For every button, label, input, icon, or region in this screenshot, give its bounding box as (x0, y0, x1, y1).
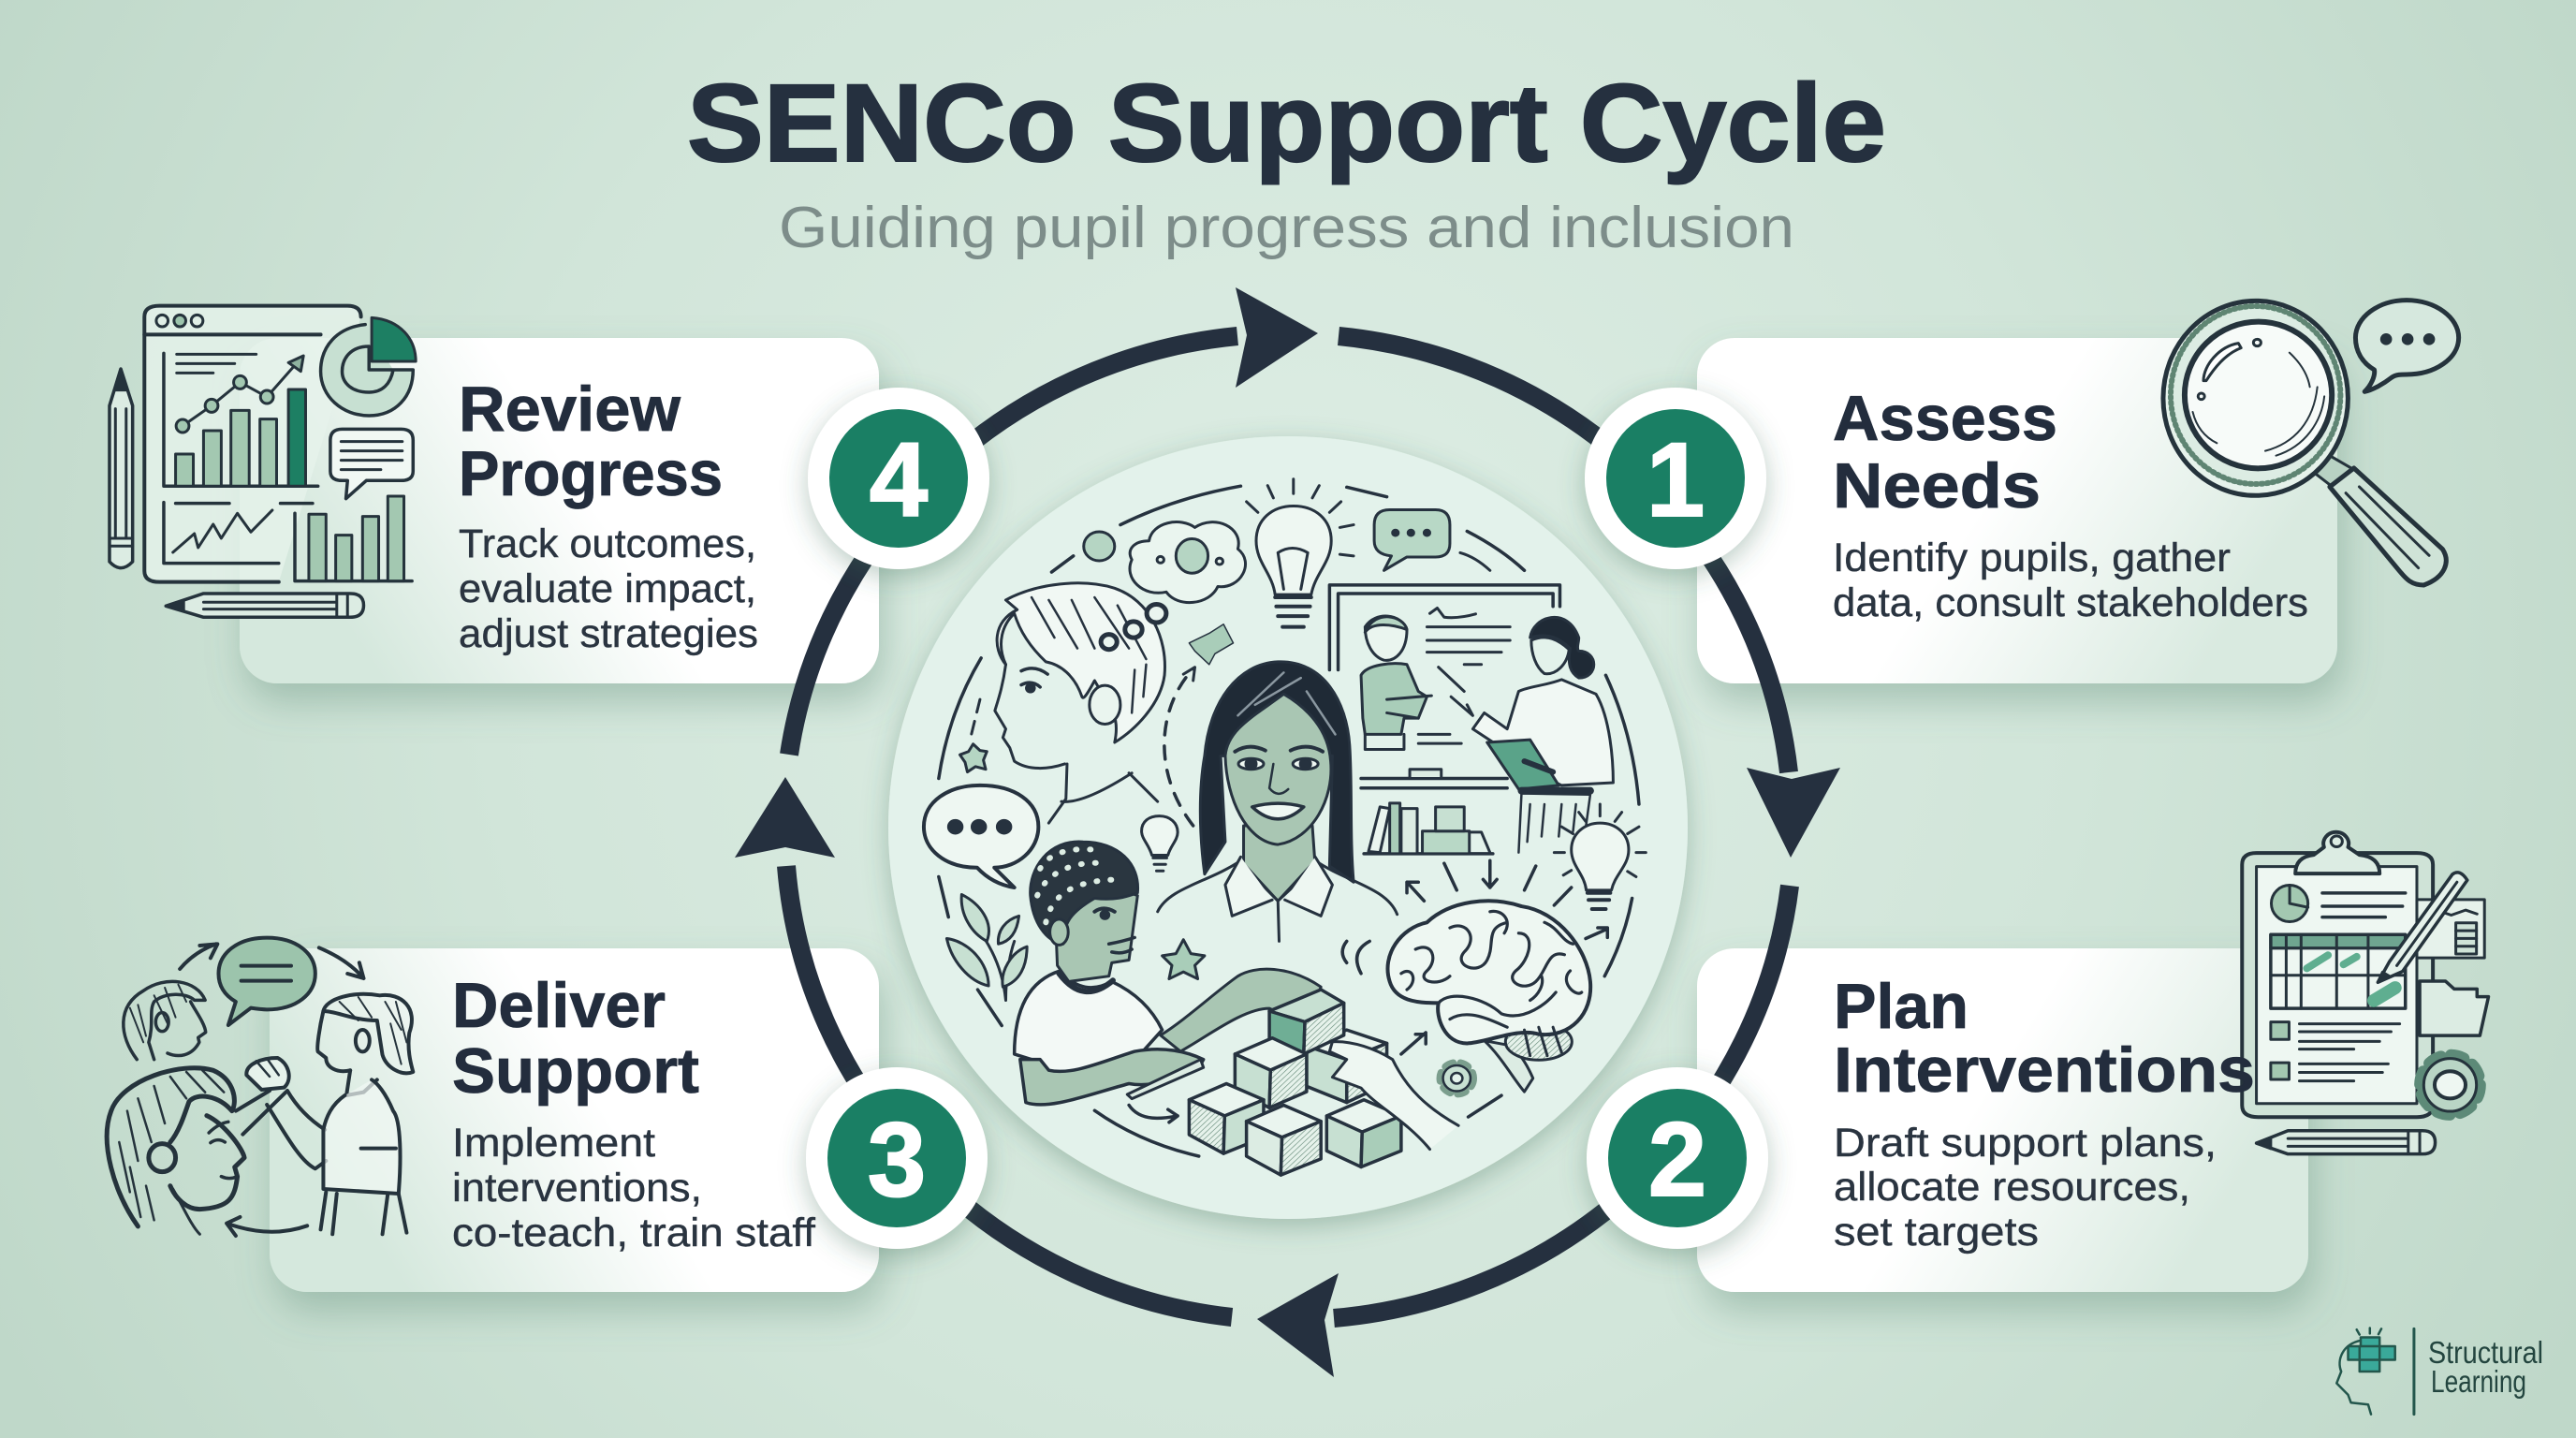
badge 4 (808, 388, 989, 569)
logo mark (2336, 1328, 2414, 1415)
icon: star (1163, 940, 1205, 979)
description: Implement (452, 1121, 655, 1166)
icon: green blob (1189, 624, 1234, 665)
heading line two: Interventions (1834, 1034, 2255, 1106)
block behind (1307, 1030, 1387, 1103)
block middle (1235, 1038, 1307, 1108)
block bottom left (1189, 1084, 1264, 1153)
icon: peer support pupils (107, 938, 413, 1236)
step badges (806, 388, 1768, 1249)
description line two: allocate resources, (1834, 1165, 2190, 1210)
curved arrows (180, 944, 363, 1236)
block top (1269, 990, 1344, 1054)
speech bubble (219, 938, 315, 1025)
icon: thought cloud (1130, 522, 1246, 603)
description line three: co-teach, train staff (452, 1211, 816, 1255)
heading line two: Support (452, 1035, 699, 1107)
description: Identify pupils, gather (1833, 536, 2231, 580)
badge 1 (1585, 388, 1766, 569)
central illustration (924, 479, 1646, 1175)
stack of blocks (1189, 990, 1401, 1175)
description line two: evaluate impact, (459, 566, 756, 611)
horizontal pencil (2257, 1131, 2436, 1154)
document (2417, 900, 2484, 958)
clipboard clip (2295, 832, 2379, 873)
heading: Deliver (452, 970, 666, 1041)
card 4 background (240, 338, 879, 683)
text: step 3 deliver support (452, 970, 816, 1255)
arrows around brain (1342, 860, 1607, 1054)
description line two: interventions, (452, 1166, 702, 1211)
description: Track outcomes, (459, 521, 756, 566)
child building blocks (1015, 842, 1321, 1123)
badge 2 (1587, 1067, 1768, 1249)
icon: review dashboard (110, 306, 416, 617)
clasped hands (236, 1058, 326, 1168)
folder (2420, 981, 2489, 1035)
logo: Structural Learning (2336, 1328, 2543, 1415)
heading line two: Needs (1833, 450, 2041, 521)
donut chart (321, 317, 416, 416)
heading line two: Progress (459, 438, 723, 509)
panel: card backgrounds (240, 338, 2337, 1292)
cycle arrows (735, 287, 1840, 1377)
arrow: review to assess (789, 287, 1318, 755)
description line three: set targets (1834, 1210, 2039, 1255)
arrow: plan to deliver (1257, 886, 1790, 1377)
dashed growth arrow (972, 668, 1195, 826)
heading: Review (459, 374, 681, 445)
text: step 2 plan interventions (1834, 971, 2255, 1255)
title: SENCo Support Cycle (687, 62, 1886, 185)
icon: gear (1441, 1063, 1473, 1093)
girl with ponytail (317, 994, 413, 1234)
block bottom right (1326, 1100, 1401, 1167)
icon: magnifying glass and speech bubble (2163, 301, 2459, 585)
block bottom middle (1247, 1105, 1321, 1175)
vertical pencil (110, 369, 133, 568)
card 1 background (1697, 338, 2337, 683)
logo word two: Learning (2431, 1364, 2526, 1399)
lower bar chart (295, 496, 412, 581)
text: step 4 review progress (459, 374, 758, 656)
description line three: adjust strategies (459, 611, 758, 656)
text: step 1 assess needs (1833, 383, 2308, 625)
subtitle: Guiding pupil progress and inclusion (779, 196, 1794, 260)
badge 1: 1 (1647, 421, 1705, 538)
icon: plant leaves (946, 894, 1027, 1001)
helper hand (1329, 1042, 1458, 1150)
schedule table (2271, 934, 2406, 1008)
badge 3 (806, 1067, 988, 1249)
arrow: assess to plan (1339, 336, 1840, 858)
logo word one: Structural (2428, 1335, 2543, 1370)
card 2 background (1697, 948, 2308, 1292)
teacher and pupil at the board (1329, 585, 1613, 853)
icon: green speech bubble (1374, 509, 1490, 570)
description line two: data, consult stakeholders (1833, 580, 2308, 625)
card 3 background (270, 948, 879, 1292)
books on shelf (1364, 803, 1493, 854)
line chart (164, 503, 313, 564)
dashboard window (144, 306, 361, 582)
diagonal pencil (2378, 873, 2467, 982)
large boy head (107, 1068, 244, 1234)
magnifying glass (2163, 301, 2446, 585)
central disc (888, 436, 1688, 1219)
pupil at the board (1361, 616, 1431, 749)
upper bar chart (164, 353, 318, 486)
description: Draft support plans, (1834, 1121, 2217, 1166)
speech bubble (2355, 301, 2459, 391)
icon: small bulb (1142, 816, 1178, 871)
boy in profile (995, 583, 1166, 823)
small pupil head (124, 981, 206, 1060)
checklist (2271, 1022, 2400, 1081)
badge 3: 3 (868, 1101, 926, 1218)
icon: right bulb (1554, 804, 1646, 909)
woman at the centre (1158, 662, 1398, 941)
icon: top light bulb (1247, 479, 1354, 627)
arrow: deliver to review (735, 777, 1232, 1317)
icon: small flower (960, 744, 987, 772)
decorative broken ring (939, 486, 1639, 1156)
chat bubble (330, 429, 413, 499)
teacher figure (1439, 617, 1613, 853)
icon: brain (1387, 901, 1590, 1092)
badge 4: 4 (870, 421, 928, 538)
heading: Assess (1833, 383, 2057, 454)
horizontal pencil (166, 594, 363, 617)
icon: large speech bubble (924, 785, 1038, 888)
heading: Plan (1834, 971, 1969, 1042)
clipboard board (2242, 853, 2433, 1117)
icon: clipboard plan (2242, 832, 2489, 1154)
gear (2421, 1055, 2480, 1114)
mini pie chart (2271, 886, 2406, 922)
icon: small green badge (1084, 532, 1115, 561)
badge 2: 2 (1648, 1101, 1706, 1218)
